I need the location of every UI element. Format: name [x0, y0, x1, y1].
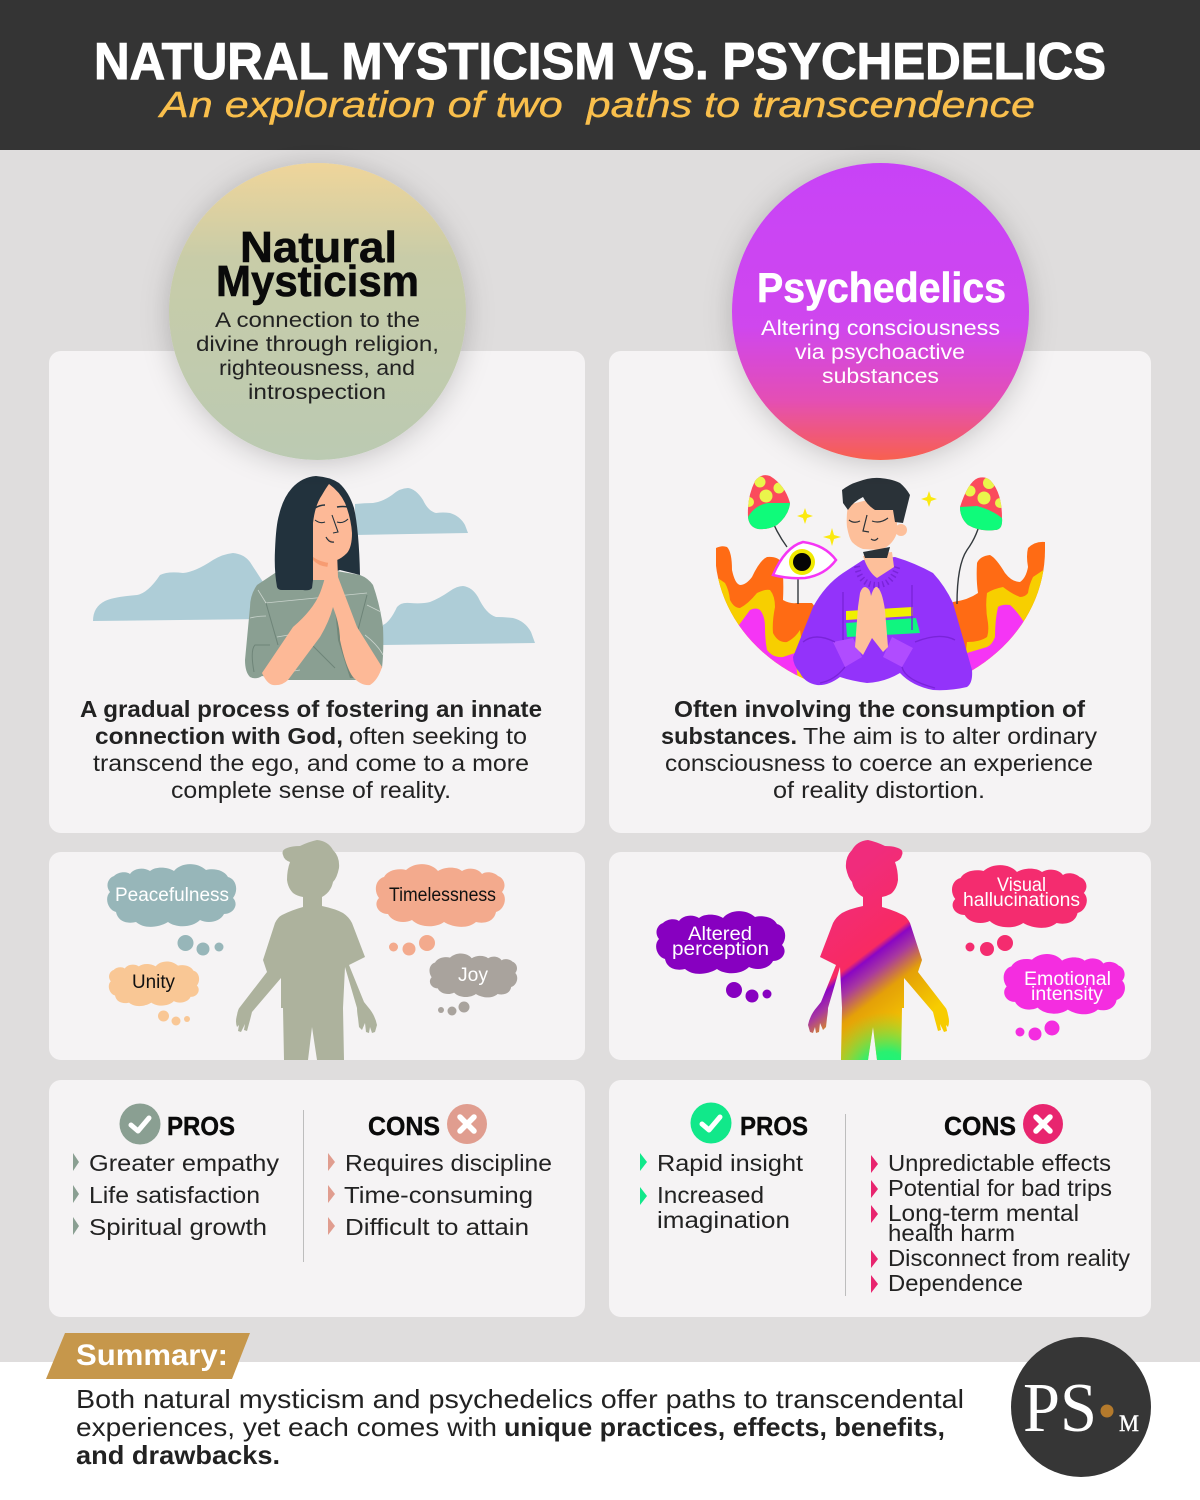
icon: cross: [447, 1104, 487, 1144]
heading: Mysticism: [216, 257, 419, 306]
description: Altering consciousness: [761, 317, 1000, 340]
heading: [216, 223, 419, 306]
panel: psychedelics overview: [609, 351, 1151, 833]
panel: psychedelics effects: [609, 840, 1151, 1060]
body text: of reality distortion.: [773, 777, 985, 803]
thought: unity: Unity: [132, 972, 175, 993]
pros list: imagination: [657, 1207, 790, 1233]
description: via psychoactive: [795, 341, 965, 364]
summary text: experiences, yet each comes with: [76, 1412, 497, 1442]
thought: emotional intensity: [1004, 954, 1125, 1040]
body text: often seeking to: [349, 723, 527, 749]
description: divine through religion,: [196, 333, 439, 356]
thought: altered perception: Altered: [688, 924, 752, 945]
header banner: [0, 0, 1200, 150]
cons list: [871, 1150, 1131, 1296]
summary text: [76, 1384, 964, 1470]
illustration: praying woman with clouds: [93, 476, 535, 685]
body text: complete sense of reality.: [171, 777, 451, 803]
body text: transcend the ego, and come to a more: [93, 750, 529, 776]
cons list: Disconnect from reality: [888, 1245, 1131, 1271]
body text: A gradual process of fostering an innate: [80, 696, 542, 722]
thought: joy: Joy: [458, 965, 488, 986]
thought: peacefulness: Peacefulness: [115, 885, 229, 906]
circle: natural mysticism: [169, 163, 466, 460]
summary text: Both natural mysticism and psychedelics offer paths to transcendental: [76, 1384, 964, 1414]
logo: M: [1119, 1411, 1139, 1436]
summary text: and drawbacks.: [76, 1440, 280, 1470]
heading: Natural: [240, 223, 397, 272]
description: A connection to the: [215, 309, 420, 332]
thought: visual hallucinations: hallucinations: [963, 890, 1080, 911]
pros list: [640, 1150, 804, 1233]
thought: altered perception: [656, 911, 785, 1002]
panel: natural mysticism pros and cons: [49, 1080, 585, 1317]
cons list: [328, 1150, 552, 1240]
cons list: Time-consuming: [344, 1182, 533, 1208]
pros list: Increased: [657, 1182, 764, 1208]
illustration: meditating man with mushrooms: [712, 475, 1045, 700]
title: NATURAL MYSTICISM VS. PSYCHEDELICS: [94, 33, 1106, 91]
thought: emotional intensity: Emotional: [1024, 969, 1111, 990]
thought: visual hallucinations: Visual: [997, 875, 1046, 896]
pros list: Greater empathy: [89, 1150, 280, 1176]
description: [196, 309, 439, 404]
thought: joy: [429, 953, 517, 1016]
body text: [80, 696, 542, 803]
thought: visual hallucinations: [952, 865, 1087, 956]
heading: cons: CONS: [944, 1111, 1016, 1141]
body text: substances.: [661, 723, 797, 749]
panel: psychedelics pros and cons: [609, 1080, 1151, 1317]
body text: [661, 696, 1098, 803]
cons list: Requires discipline: [345, 1150, 552, 1176]
thought: timelessness: [376, 864, 505, 956]
thought: timelessness: Timelessness: [389, 885, 496, 906]
description: introspection: [248, 381, 386, 404]
thought: peacefulness: [107, 864, 236, 956]
panel: natural mysticism overview: [49, 351, 585, 833]
cons list: Unpredictable effects: [888, 1150, 1111, 1176]
circle: psychedelics: [732, 163, 1029, 460]
pros list: Life satisfaction: [89, 1182, 260, 1208]
body text: connection with God,: [95, 723, 343, 749]
icon: cross: [1023, 1104, 1063, 1144]
panel: natural mysticism effects: [49, 840, 585, 1060]
cons list: health harm: [888, 1220, 1015, 1246]
cons list: Long-term mental: [888, 1200, 1079, 1226]
description: substances: [822, 365, 939, 388]
cons list: Dependence: [888, 1270, 1023, 1296]
subtitle: An exploration of two paths to transcendence: [158, 84, 1035, 125]
icon: check: [120, 1104, 160, 1144]
description: [761, 317, 1000, 388]
thought: emotional intensity: intensity: [1031, 984, 1104, 1005]
logo: PS: [1023, 1370, 1097, 1447]
description: righteousness, and: [219, 357, 415, 380]
silhouette: rainbow person: [808, 840, 949, 1060]
body text: Often involving the consumption of: [674, 696, 1085, 722]
silhouette: person: [236, 840, 377, 1060]
thought: altered perception: perception: [672, 939, 769, 960]
cons list: Potential for bad trips: [888, 1175, 1112, 1201]
heading: pros: PROS: [167, 1111, 235, 1141]
heading: cons: CONS: [368, 1111, 440, 1141]
body text: consciousness to coerce an experience: [665, 750, 1093, 776]
thought: unity: [109, 961, 199, 1026]
heading: Psychedelics: [757, 264, 1006, 311]
body text: The aim is to alter ordinary: [803, 723, 1098, 749]
summary tag: Summary:: [76, 1339, 228, 1372]
pros list: Rapid insight: [657, 1150, 804, 1176]
icon: check: [690, 1102, 732, 1144]
logo: [1011, 1337, 1151, 1477]
summary text: unique practices, effects, benefits,: [504, 1412, 945, 1442]
cons list: Difficult to attain: [345, 1214, 529, 1240]
pros list: [73, 1150, 280, 1240]
summary tag: [46, 1333, 250, 1379]
pros list: Spiritual growth: [89, 1214, 267, 1240]
heading: pros: PROS: [740, 1111, 808, 1141]
